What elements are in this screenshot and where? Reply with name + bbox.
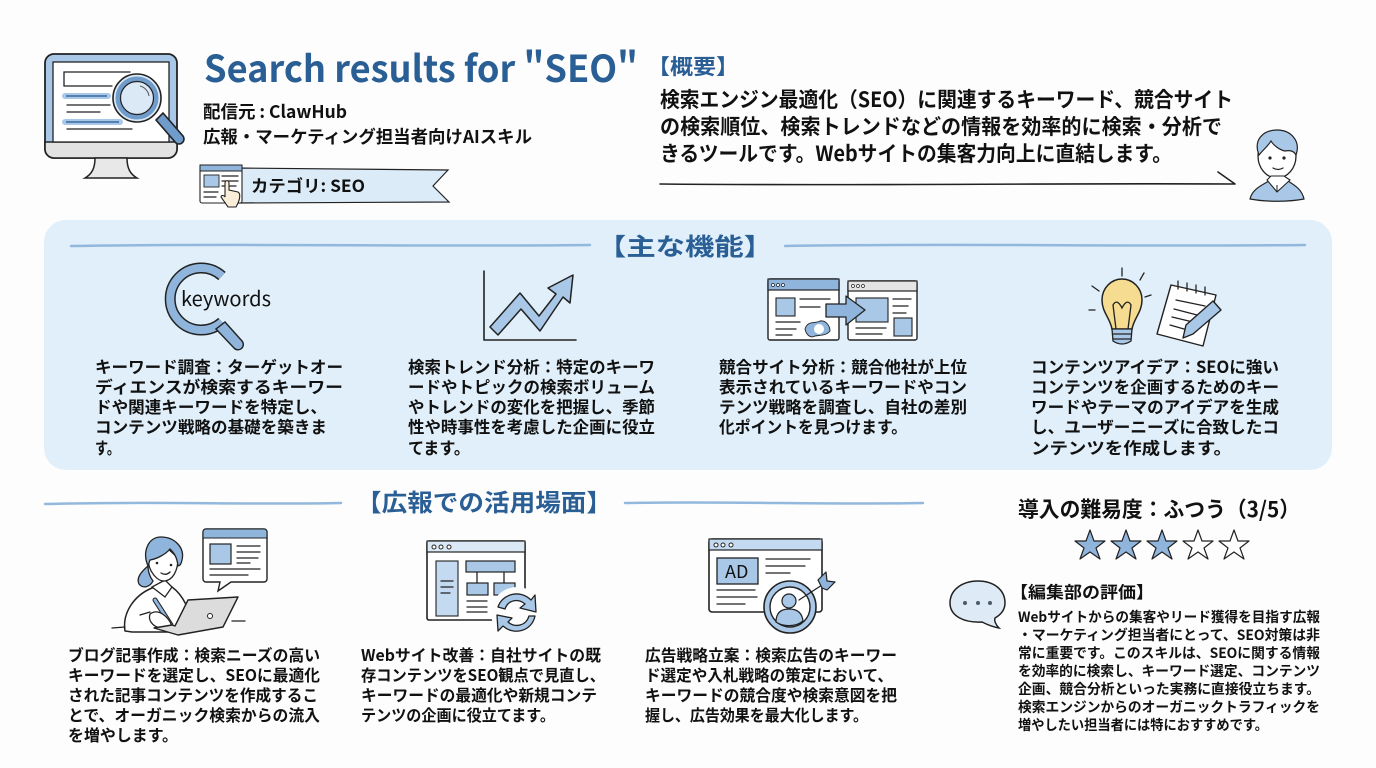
editorial text: 常に重要です。このスキルは、SEOに関する情報 [1018,643,1320,663]
feature text: keyword research: す。 [95,435,120,459]
icon: monitor with magnifier [45,54,184,178]
use case text: blog articles: された記事コンテンツを作成するこ [68,682,318,706]
feature text: competitor analysis: 化ポイントを見つけます。 [719,414,907,438]
use case text: website improvement [361,642,605,726]
source and audience text: 配信元 : ClawHub [203,99,347,124]
feature text: trend analysis [408,354,655,459]
use case text: ad strategy: 握し、広告効果を最大化します。 [645,702,868,726]
feature text: trend analysis: やトレンドの変化を把握し、季節 [408,394,655,418]
feature text: trend analysis: 検索トレンド分析：特定のキーワ [408,354,655,378]
use case text: ad strategy: ド選定や入札戦略の策定において、 [645,662,893,686]
overview text: の検索順位、検索トレンドなどの情報を効率的に検索・分析で [660,111,1222,141]
difficulty heading: 導入の難易度：ふつう（3/5） [1018,493,1300,524]
feature text: trend analysis: 性や時事性を考慮した企画に役立 [408,414,655,438]
heading: main features: 【主な機能】 [597,227,773,262]
overview text: 検索エンジン最適化（SEO）に関連するキーワード、競合サイト [660,84,1233,114]
use case text: blog articles: ブログ記事作成：検索ニーズの高い [68,642,320,666]
feature text: keyword research: キーワード調査：ターゲットオー [95,354,343,378]
icon: ad window and target: AD [725,558,748,584]
icon: woman with laptop and speech window [112,529,267,635]
use case text: blog articles: キーワードを選定し、SEOに最適化 [68,662,320,686]
overview heading: 【概要】 [647,51,739,81]
feature text: keyword research: ディエンスが検索するキーワー [95,374,343,398]
icon: website improvement [427,541,543,639]
icon: speech bubble [950,581,1005,628]
icon: light bulb and notepad [1089,268,1221,346]
arrow under overview [660,172,1235,185]
feature text: content ideas: し、ユーザーニーズに合致したコ [1031,414,1279,438]
editorial text: Webサイトからの集客やリード獲得を目指す広報 [1018,607,1320,627]
source and audience text: 広報・マーケティング担当者向けAIスキル [203,124,532,149]
use case text: ad strategy: キーワードの競合度や検索意図を把 [645,682,897,706]
feature text: content ideas: ンテンツを作成します。 [1031,435,1232,459]
heading: PR use cases: 【広報での活用場面】 [356,483,612,518]
icon: keywords magnifier: keywords [181,283,271,312]
feature text: content ideas: ワードやテーマのアイデアを生成 [1031,394,1279,418]
icon: ad window and target [709,539,835,633]
editorial text: ・マーケティング担当者にとって、SEO対策は非 [1018,625,1320,645]
overview text: きるツールです。Webサイトの集客力向上に直結します。 [660,138,1172,168]
use case text: blog articles: を増やします。 [68,722,178,746]
editorial text [1018,607,1320,735]
use case text: ad strategy: 広告戦略立案：検索広告のキーワー [645,642,897,666]
use case text: website improvement: Webサイト改善：自社サイトの既 [361,642,601,666]
use case text: ad strategy [645,642,897,726]
editorial heading: 【編集部の評価】 [1010,579,1154,603]
feature text: trend analysis: ードやトピックの検索ボリューム [408,374,655,398]
use case text: website improvement: キーワードの最適化や新規コンテ [361,682,597,706]
feature text: content ideas: コンテンツアイデア：SEOに強い [1031,354,1279,378]
editorial text: 企画、競合分析といった実務に直接役立ちます。 [1018,679,1320,699]
icon: keywords magnifier [170,268,271,350]
title: Search results for "SEO" [204,39,638,93]
use case text: blog articles [68,642,320,746]
category ribbon [200,165,449,207]
icon: person [1250,130,1304,201]
feature text: content ideas: コンテンツを企画するためのキー [1031,374,1279,398]
use case text: website improvement: テンツの企画に役立てます。 [361,702,555,726]
editorial text: 増やしたい担当者には特におすすめです。 [1018,715,1268,735]
category ribbon: カテゴリ: SEO [251,172,365,197]
feature text: content ideas [1031,354,1279,459]
icon: trend chart [484,271,576,340]
use case text: blog articles: とで、オーガニック検索からの流入 [68,702,320,726]
feature text: keyword research [95,354,343,459]
star rating [1075,530,1249,559]
feature text: trend analysis: てます。 [408,435,470,459]
feature text: competitor analysis: 競合サイト分析：競合他社が上位 [719,354,967,378]
feature text: keyword research: コンテンツ戦略の基礎を築きま [95,414,327,438]
feature text: competitor analysis: 表示されているキーワードやコン [719,374,967,398]
icon: competitor windows [768,279,917,340]
editorial text: を効率的に検索し、キーワード選定、コンテンツ [1018,661,1320,681]
feature text: competitor analysis [719,354,967,438]
overview text [660,84,1233,168]
feature text: keyword research: ドや関連キーワードを特定し、 [95,394,327,418]
source and audience text [203,99,532,149]
section rules [45,502,923,504]
use case text: website improvement: 存コンテンツをSEO観点で見直し、 [361,662,605,686]
feature text: competitor analysis: テンツ戦略を調査し、自社の差別 [719,394,967,418]
editorial text: 検索エンジンからのオーガニックトラフィックを [1018,697,1320,717]
panel: main features [44,220,1332,470]
